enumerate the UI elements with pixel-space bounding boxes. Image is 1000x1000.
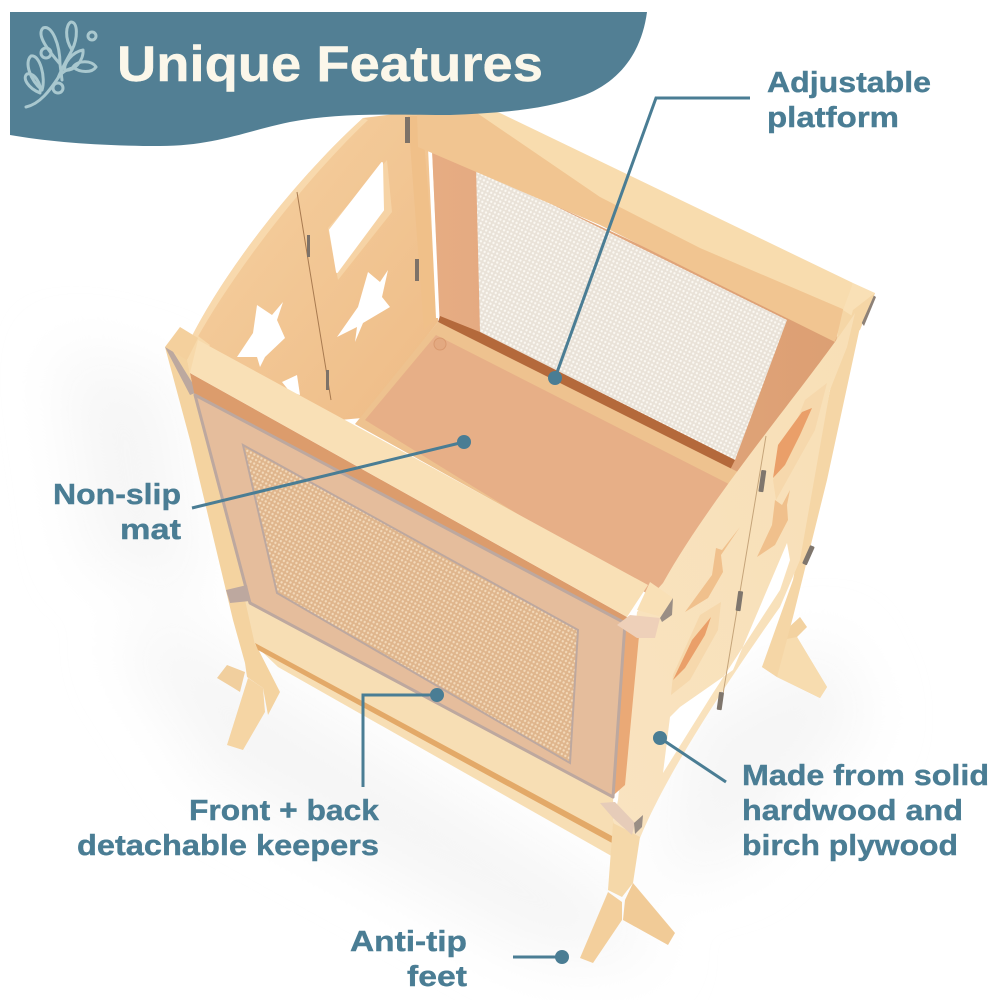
callout: hardwood material: birch plywood bbox=[742, 830, 958, 862]
callout: hardwood material: Made from solid bbox=[742, 760, 989, 792]
mat bbox=[365, 335, 770, 620]
mat corner button bbox=[434, 338, 446, 350]
left back foot bbox=[217, 665, 245, 692]
callout: detachable keepers: detachable keepers bbox=[77, 830, 379, 862]
front right post and foot bbox=[580, 823, 675, 963]
front foot bbox=[580, 892, 622, 963]
callout: anti-tip feet bbox=[350, 926, 569, 993]
star left bbox=[237, 302, 285, 367]
callout: adjustable platform: Adjustable bbox=[767, 67, 931, 99]
product: wooden learning tower bbox=[165, 104, 876, 963]
left corner strap bbox=[165, 347, 198, 395]
bottom metal bbox=[634, 815, 643, 834]
orange sliver bbox=[608, 620, 640, 800]
callout: non-slip mat bbox=[53, 435, 471, 546]
lower hole bbox=[673, 617, 711, 680]
floor bbox=[355, 322, 770, 620]
callout: adjustable platform: platform bbox=[767, 102, 899, 134]
callout: hardwood material bbox=[653, 731, 989, 862]
right corner block bbox=[637, 582, 673, 617]
star third bbox=[282, 375, 300, 395]
top clip bbox=[617, 615, 660, 638]
title banner bbox=[10, 12, 647, 146]
front left foot bbox=[227, 678, 265, 750]
upper hole rim bbox=[773, 383, 827, 500]
top rail top bbox=[470, 104, 853, 310]
seam bbox=[722, 436, 766, 700]
slot shadow bbox=[438, 316, 735, 470]
right back foot bbox=[762, 617, 827, 698]
callout: adjustable platform bbox=[548, 67, 931, 385]
ledge strip bbox=[255, 643, 612, 843]
top rail face bbox=[417, 108, 845, 342]
front keeper fabric bbox=[195, 395, 673, 835]
top metal bbox=[660, 598, 673, 622]
hinge strip bbox=[408, 116, 438, 330]
top right corner block bbox=[843, 283, 875, 323]
callout: detachable keepers bbox=[77, 688, 444, 862]
front rail bbox=[165, 327, 673, 625]
back mesh bbox=[476, 167, 787, 460]
strap bbox=[226, 585, 250, 603]
left side panel with cutouts bbox=[190, 112, 440, 420]
front left post and foot bbox=[165, 347, 280, 750]
callout: detachable keepers: Front + back bbox=[189, 795, 380, 827]
callout: non-slip mat: Non-slip bbox=[53, 479, 181, 511]
right side leg bbox=[762, 293, 875, 677]
callout: anti-tip feet: feet bbox=[407, 961, 467, 993]
star right bbox=[337, 270, 390, 342]
rear foot bbox=[623, 883, 675, 945]
callout: hardwood material: hardwood and bbox=[742, 795, 963, 827]
hole diamond bbox=[330, 163, 383, 272]
title text: Unique Features bbox=[117, 36, 543, 92]
callout: non-slip mat: mat bbox=[120, 514, 181, 546]
hole rim bbox=[328, 160, 392, 280]
back fabric bbox=[432, 148, 840, 500]
bottom clip bbox=[600, 802, 635, 835]
panel seam bbox=[297, 192, 331, 400]
rail shadow bbox=[190, 373, 627, 625]
panel rim bbox=[190, 118, 368, 340]
right side panel with cutouts bbox=[608, 313, 855, 838]
white opening bbox=[663, 543, 790, 773]
platform rim bbox=[355, 322, 770, 610]
front lower board bbox=[245, 600, 615, 858]
lower hole rim bbox=[671, 602, 721, 695]
white gap bbox=[428, 148, 440, 318]
left rail filler bbox=[187, 336, 210, 376]
corner filler bbox=[835, 293, 875, 345]
floor shadows bbox=[60, 350, 870, 960]
rail body bbox=[190, 340, 648, 617]
callout: anti-tip feet: Anti-tip bbox=[350, 926, 467, 958]
hinges bbox=[717, 470, 815, 710]
icon: leaf sprig bbox=[25, 22, 96, 107]
left corner block bbox=[165, 327, 198, 360]
corner metal bbox=[861, 295, 876, 326]
hinges bbox=[307, 117, 419, 390]
lower star bbox=[685, 527, 740, 612]
upper hole bbox=[773, 408, 812, 478]
back panel bbox=[417, 104, 876, 500]
front mesh bbox=[243, 445, 578, 763]
upper star bbox=[757, 490, 790, 557]
